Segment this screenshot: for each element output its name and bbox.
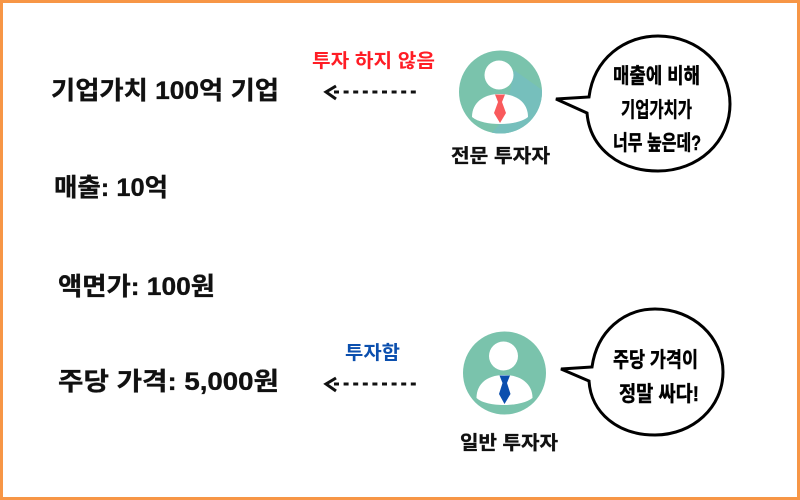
text: revenue: 매출: 10억 [54, 174, 168, 202]
speech bubble: professional investor [556, 36, 730, 171]
icon: retail investor [463, 332, 546, 414]
speech bubble: retail investor: 주당 가격이 [613, 349, 698, 372]
speech bubble: professional investor: 매출에 비해 [613, 65, 700, 88]
speech bubble: retail investor [561, 309, 723, 435]
label: invests: 투자함 [345, 342, 400, 364]
arrow: bottom dotted arrow [326, 378, 418, 391]
speech bubble: professional investor: 너무 높은데? [613, 132, 701, 155]
label: retail investor: 일반 투자자 [460, 432, 559, 454]
speech bubble: retail investor: 정말 싸다! [619, 383, 699, 406]
text: company valuation: 기업가치 100억 기업 [51, 77, 279, 105]
icon: professional investor [459, 50, 545, 135]
text: share price: 주당 가격: 5,000원 [58, 368, 279, 396]
arrow: top dotted arrow [326, 86, 418, 99]
text: par value: 액면가: 100원 [58, 273, 215, 301]
speech bubble: professional investor: 기업가치가 [621, 99, 692, 122]
label: professional investor: 전문 투자자 [451, 145, 551, 167]
label: does not invest: 투자 하지 않음 [312, 50, 435, 72]
